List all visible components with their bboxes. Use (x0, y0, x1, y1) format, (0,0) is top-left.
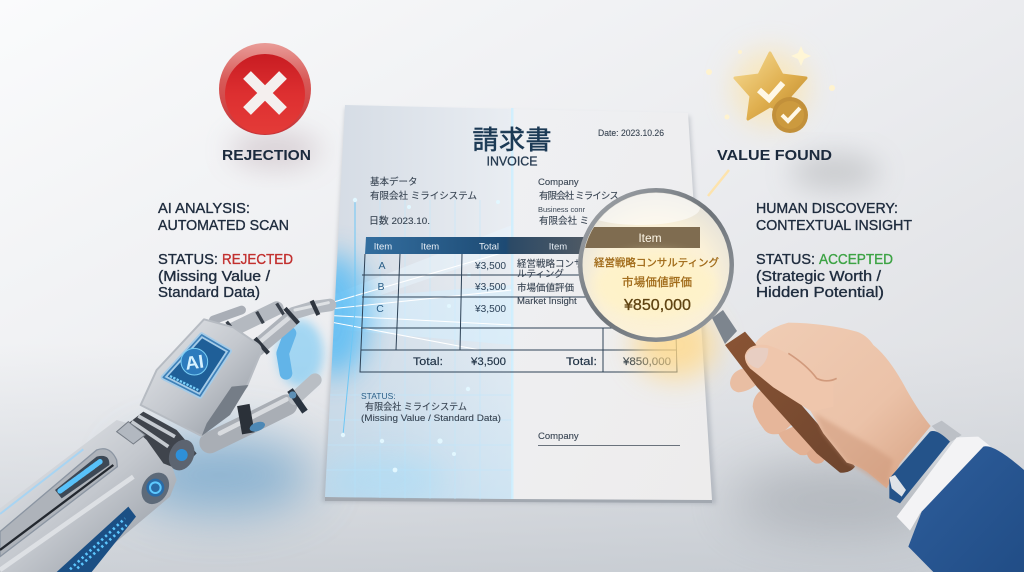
totals: ¥850,000 (622, 356, 671, 368)
paper sheet left half (325, 105, 512, 499)
right details: 有限会社 ミライシス (539, 190, 619, 202)
text block: AI analysis: REJECTED (222, 252, 293, 268)
header labels: Item (549, 242, 567, 252)
bent blue finger (283, 333, 290, 373)
icon: value found star (706, 46, 835, 133)
row descriptions: 経営戦略コンサ (517, 258, 584, 270)
lens contents (585, 193, 719, 314)
heading: rejection: REJECTION (222, 147, 311, 164)
right details: 有限会社 ミ (539, 215, 589, 227)
left details (369, 176, 477, 227)
watch buckle (889, 475, 906, 497)
lower blue panel (57, 507, 136, 572)
scan light beams (330, 202, 511, 498)
ring finger (778, 423, 815, 455)
sparkles (791, 46, 811, 66)
text block: human discovery: (Strategic Worth / (756, 269, 882, 285)
watch strap (889, 431, 950, 503)
gold glow under magnifier (633, 311, 717, 379)
row prices (474, 261, 506, 315)
row descriptions: 市場価値評価 (517, 282, 575, 294)
right details (538, 177, 619, 227)
row prices: ¥3,500 (474, 282, 506, 293)
row labels: C (376, 303, 384, 315)
thumb (745, 345, 833, 412)
text block: human discovery: HUMAN DISCOVERY: (756, 201, 898, 217)
wrist plate (117, 422, 145, 444)
scan nodes (341, 198, 500, 472)
right details: Company (538, 177, 579, 188)
table grid (360, 254, 677, 372)
text block: AI analysis (158, 201, 293, 301)
date: Date: 2023.10.26 (598, 128, 664, 139)
hand shading (815, 413, 893, 487)
row prices: ¥3,500 (474, 261, 506, 272)
light streak (708, 170, 729, 196)
status note: 有限会社 ミライシステム (365, 401, 467, 413)
human hand with sleeve (725, 323, 1024, 572)
invoice document (301, 105, 712, 505)
check badge (772, 97, 808, 133)
magnifying glass (575, 188, 737, 344)
row prices: ¥3,500 (474, 304, 506, 315)
left details: 基本データ (370, 176, 418, 188)
status note (361, 391, 501, 424)
heading: value found: VALUE FOUND (717, 147, 832, 164)
invoice subtitle: INVOICE (486, 154, 538, 168)
magnifier handle (725, 332, 855, 473)
header labels: Item (374, 242, 392, 252)
neck (712, 310, 737, 344)
suit sleeve (908, 446, 1024, 572)
text block: human discovery: ACCEPTED (819, 252, 893, 268)
row descriptions (517, 258, 584, 307)
arm ring button (136, 468, 175, 509)
dark upper panel (0, 449, 117, 557)
AI screen (163, 335, 229, 396)
signature: Company (538, 431, 579, 442)
wrist joint (128, 412, 197, 470)
text block: human discovery: STATUS: (756, 252, 815, 268)
row descriptions: Market Insight (517, 296, 577, 307)
index finger (257, 320, 290, 348)
rim (578, 188, 734, 342)
magnified header: Item (638, 231, 662, 245)
right details: Business conr (538, 205, 586, 214)
cuff (897, 437, 990, 531)
icon: rejection (219, 43, 311, 135)
forearm (0, 420, 177, 572)
black slot (0, 465, 113, 550)
index finger (730, 368, 759, 392)
paper edge (325, 497, 712, 503)
blue scan tint (325, 105, 512, 499)
header labels (374, 242, 567, 252)
thumb crease (788, 353, 837, 381)
status note: STATUS: (361, 391, 396, 401)
blue fingertip glow (277, 320, 323, 387)
totals (413, 356, 671, 368)
text block: human discovery: CONTEXTUAL INSIGHT (756, 218, 912, 234)
middle finger (753, 388, 797, 434)
totals: Total: (566, 356, 597, 368)
long back fingers (213, 310, 242, 320)
soft shadows (125, 108, 950, 535)
left details: 有限会社 ミライシステム (370, 190, 477, 202)
AI label: AI (184, 350, 205, 374)
lens (582, 192, 730, 338)
totals: Total: (413, 356, 443, 368)
magnified price: ¥850,000 (623, 297, 691, 314)
magnified item: 市場価値評価 (622, 276, 692, 289)
totals: ¥3,500 (470, 356, 506, 368)
robot arm (0, 301, 330, 572)
light strip capsule (55, 456, 109, 498)
lower silver band (0, 477, 133, 570)
text block: human discovery: Hidden Potential) (756, 285, 884, 301)
header labels: Total (479, 242, 499, 252)
text block: human discovery (756, 201, 912, 301)
text block: AI analysis: AI ANALYSIS: (158, 201, 250, 217)
text block: AI analysis: Standard Data) (158, 285, 260, 301)
paper sheet right half (512, 109, 712, 500)
text block: AI analysis: AUTOMATED SCAN (158, 218, 289, 234)
left details: 日数 2023.10. (369, 215, 430, 227)
row labels (376, 260, 386, 315)
status note: (Missing Value / Standard Data) (361, 413, 501, 424)
wrist dial (164, 435, 199, 475)
forearm light rail (0, 449, 83, 514)
magnified service: 経営戦略コンサルティング (594, 256, 720, 269)
table header (365, 237, 600, 254)
watch case (932, 421, 962, 443)
row labels: B (377, 281, 385, 293)
invoice title: 請求書 (472, 125, 552, 155)
thumbnail (746, 348, 768, 368)
invoice table (360, 237, 677, 372)
scan grid (320, 200, 512, 500)
thumb (210, 405, 287, 443)
row descriptions: ルティング (517, 268, 564, 280)
pinky finger (807, 443, 826, 464)
header labels: Item (421, 242, 439, 252)
divider light (511, 108, 514, 499)
text block: AI analysis: (Missing Value / (158, 269, 271, 285)
row labels: A (378, 260, 386, 272)
palm and back of hand (755, 323, 931, 488)
hand back (141, 319, 261, 436)
text block: AI analysis: STATUS: (158, 252, 218, 268)
